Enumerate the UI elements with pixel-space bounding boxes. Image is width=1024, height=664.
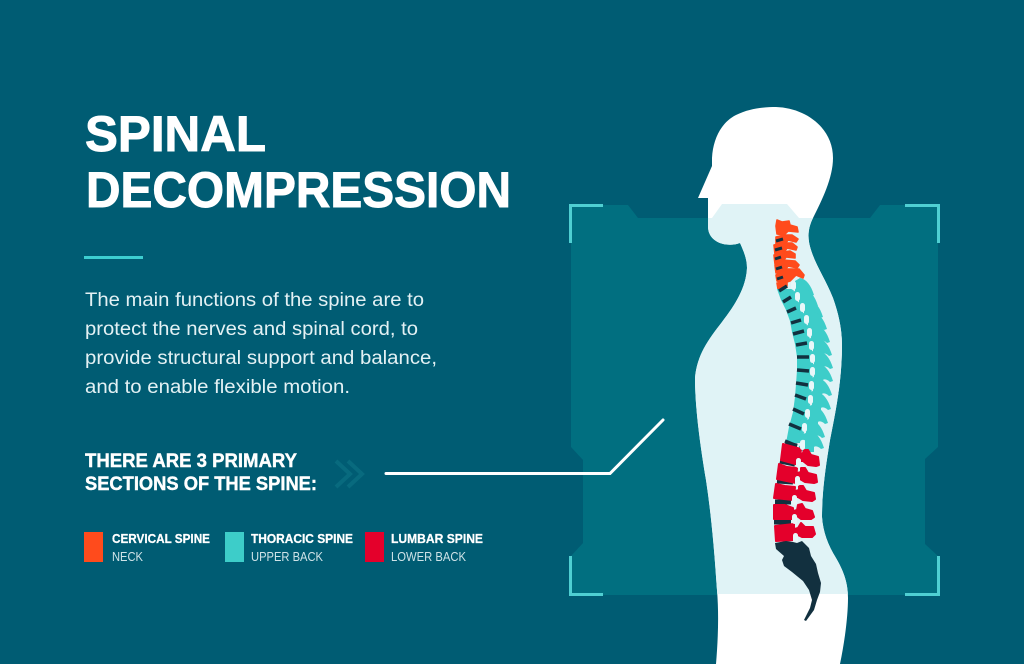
cervical vertebrae (774, 220, 804, 290)
sections heading (85, 451, 317, 495)
lumbar joints (792, 440, 805, 543)
intro text block: provide structural support and balance, (85, 348, 437, 369)
callout line (386, 420, 663, 474)
intro text block: and to enable flexible motion. (85, 377, 350, 398)
title: DECOMPRESSION (86, 162, 511, 218)
title: SPINAL (85, 106, 266, 162)
scan panel (571, 205, 938, 595)
sections heading: SECTIONS OF THE SPINE: (85, 474, 317, 495)
legend: lumbar spine (365, 532, 483, 564)
icon: chevrons (336, 461, 362, 487)
spine (774, 220, 833, 621)
intro text block: The main functions of the spine are to (85, 290, 424, 311)
intro text block: protect the nerves and spinal cord, to (85, 319, 418, 340)
legend: lumbar spine: LOWER BACK (391, 550, 467, 564)
legend: thoracic spine: UPPER BACK (251, 550, 324, 564)
cervical discs (775, 239, 783, 279)
intro text block (85, 290, 437, 398)
title (85, 106, 511, 218)
lumbar vertebrae (774, 444, 819, 541)
body silhouette (695, 107, 848, 664)
legend: thoracic spine (225, 532, 353, 564)
panel corner brackets (570, 206, 938, 594)
thoracic discs (779, 286, 809, 446)
lumbar discs (774, 444, 797, 522)
sacrum and coccyx (775, 541, 821, 621)
legend: thoracic spine: THORACIC SPINE (251, 532, 353, 546)
legend: cervical spine: CERVICAL SPINE (112, 532, 210, 546)
title accent rule (84, 256, 143, 259)
thoracic vertebrae (777, 278, 833, 452)
sections heading: THERE ARE 3 PRIMARY (85, 451, 297, 472)
legend: cervical spine (84, 532, 210, 564)
legend: lumbar spine: LUMBAR SPINE (391, 532, 483, 546)
legend: cervical spine: NECK (112, 550, 144, 564)
thoracic joints (791, 281, 815, 432)
